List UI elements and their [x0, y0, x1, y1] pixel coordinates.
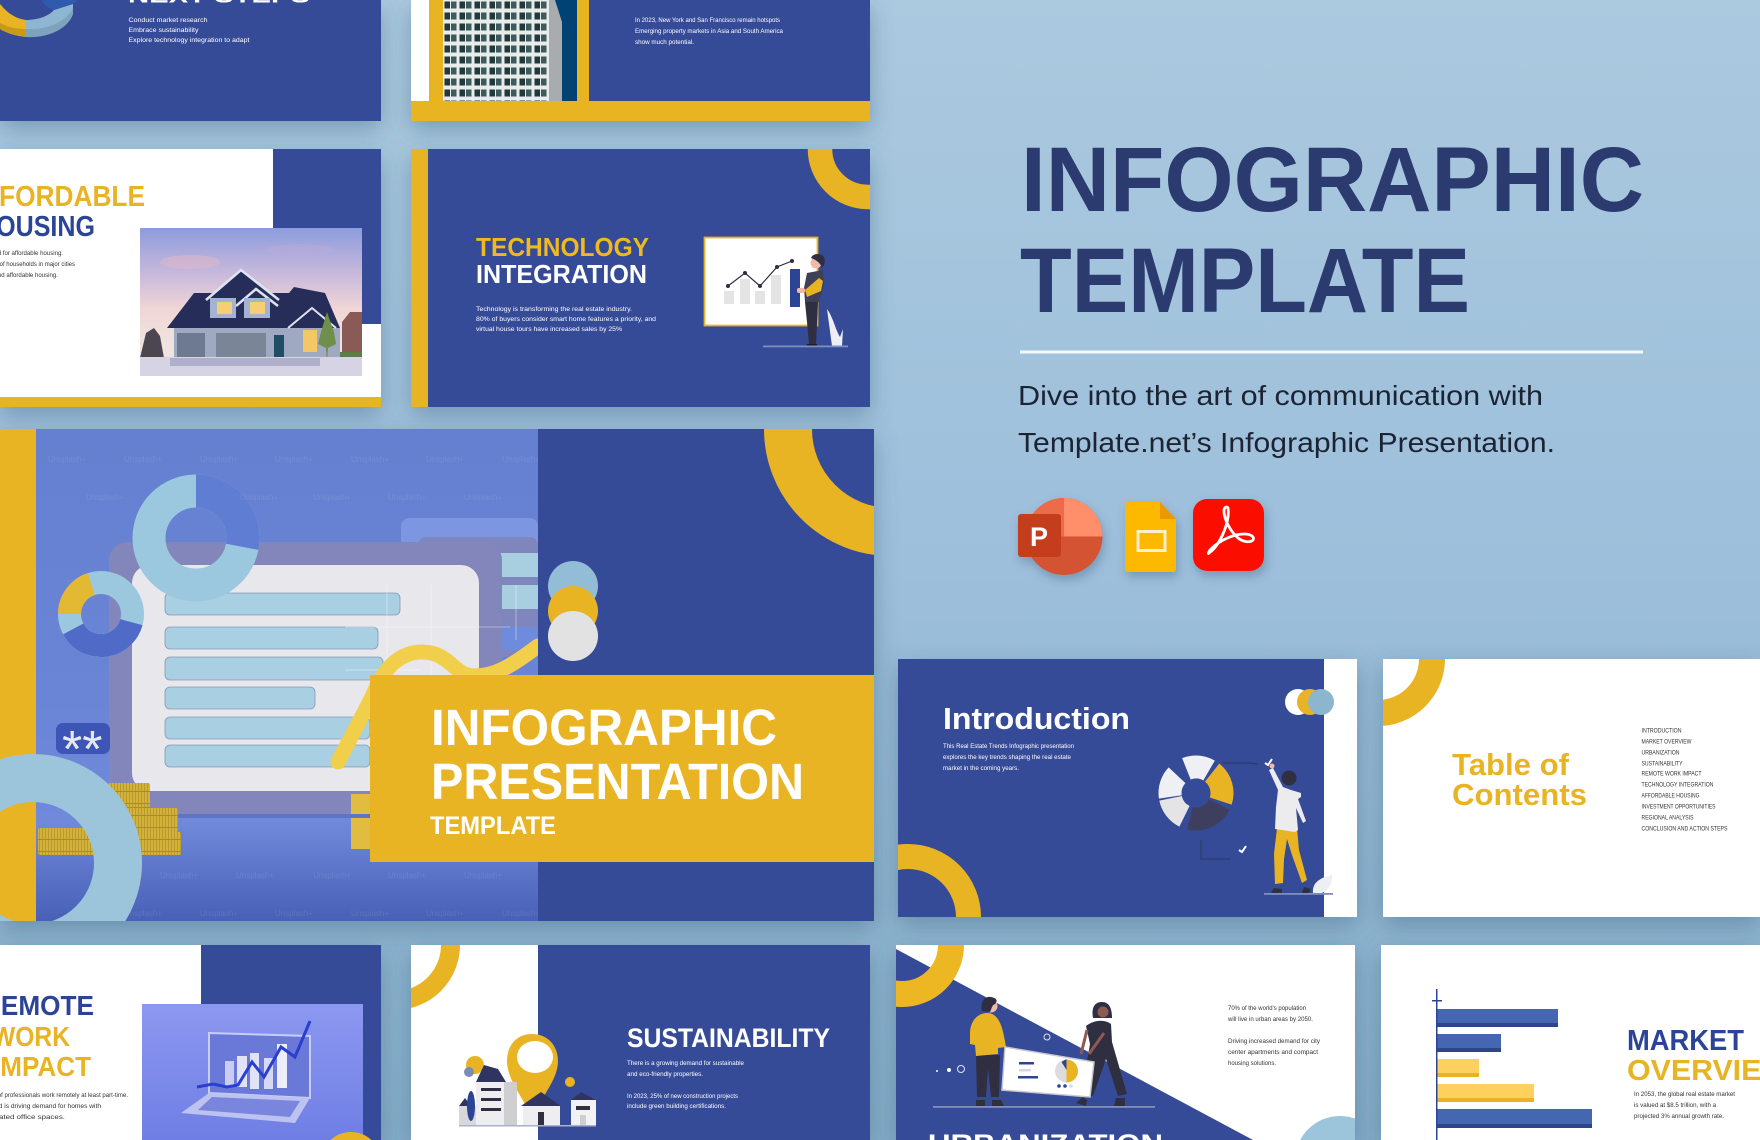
- body text: In 2053, the global real estate market: [1634, 1091, 1735, 1098]
- body text: [128, 17, 250, 44]
- body text: Emerging property markets in Asia and South America: [635, 28, 783, 35]
- body text: projected 3% annual growth rate.: [1634, 1113, 1724, 1120]
- body text: center apartments and compact: [1228, 1049, 1318, 1056]
- watermarks: Unsplash+: [313, 493, 351, 502]
- ring top right: [788, 326, 994, 532]
- 3d scene image: **: [62, 721, 102, 779]
- icon: powerpoint: P: [1030, 522, 1048, 552]
- body text: [0, 1092, 128, 1121]
- icon: google slides: [1125, 502, 1176, 572]
- contents list: SUSTAINABILITY: [1642, 760, 1683, 768]
- title panel: [370, 675, 874, 862]
- heading: Table of: [1452, 747, 1570, 782]
- panel: sustainability slide: [340, 890, 870, 1140]
- person illustration: [1239, 759, 1333, 895]
- contents list: REMOTE WORK IMPACT: [1642, 770, 1702, 778]
- body text: [635, 17, 783, 46]
- illustration: pin and buildings: [459, 1034, 596, 1126]
- icon: powerpoint: [1018, 498, 1102, 575]
- contents list: AFFORDABLE HOUSING: [1642, 792, 1700, 800]
- watermarks: Unsplash+: [351, 455, 389, 464]
- body text: [1227, 1005, 1321, 1067]
- subtitle text: Template.net’s Infographic Presentation.: [1018, 427, 1555, 458]
- body text: show much potential.: [635, 39, 694, 46]
- contents list: CONCLUSION AND ACTION STEPS: [1642, 826, 1728, 832]
- contents list: INTRODUCTION: [1642, 728, 1682, 734]
- watermarks: [48, 455, 540, 918]
- watermarks: Unsplash+: [200, 909, 238, 918]
- three circles: [1285, 689, 1334, 715]
- illustration: two people holding a board: [933, 997, 1155, 1108]
- heading: [0, 990, 94, 1082]
- body text: [627, 1060, 744, 1110]
- photo: skyscraper: [443, 0, 577, 101]
- body text: Explore technology integration to adapt: [128, 37, 250, 44]
- panel: remote work impact slide: [0, 945, 381, 1140]
- ring decoration: [1383, 659, 1445, 726]
- body text: virtual house tours have increased sales by 25%: [476, 326, 622, 333]
- body text: 70% of the world’s population: [1228, 1005, 1306, 1012]
- icon: pdf: [1193, 499, 1264, 571]
- watermarks: Unsplash+: [200, 455, 238, 464]
- body text: Driving increased demand for city: [1228, 1038, 1321, 1045]
- watermarks: Unsplash+: [351, 909, 389, 918]
- body text: Conduct market research: [128, 17, 208, 24]
- ring decoration: [898, 844, 981, 917]
- panel: top centre regional slide: [411, 0, 870, 121]
- heading: INTEGRATION: [476, 259, 647, 289]
- panel: main cover slide: [0, 326, 994, 948]
- contents list: REGIONAL ANALYSIS: [1642, 814, 1694, 822]
- body text: Technology is transforming the real estate industry.: [476, 306, 632, 313]
- title panel: TEMPLATE: [430, 812, 556, 840]
- watermarks: Unsplash+: [48, 455, 86, 464]
- contents list: [1642, 728, 1728, 832]
- body text: This Real Estate Trends Infographic presentation: [943, 743, 1074, 750]
- body text: housing solutions.: [1228, 1060, 1276, 1067]
- photo: house: [140, 228, 362, 376]
- body text: [943, 743, 1074, 772]
- body text: will live in urban areas by 2050.: [1227, 1016, 1313, 1023]
- body text: and eco-friendly properties.: [627, 1071, 703, 1078]
- watermarks: Unsplash+: [275, 455, 313, 464]
- watermarks: Unsplash+: [86, 493, 124, 502]
- contents list: INVESTMENT OPPORTUNITIES: [1642, 804, 1716, 810]
- heading: TECHNOLOGY: [476, 232, 649, 262]
- illustration: presenter with chart: [704, 238, 848, 347]
- watermarks: Unsplash+: [313, 871, 351, 880]
- panel: introduction slide: [848, 659, 1357, 978]
- small donut: [62, 575, 140, 653]
- image: laptop with chart: [142, 1004, 363, 1140]
- bar chart: [1432, 989, 1592, 1140]
- panel: top left next steps slide: [0, 0, 381, 121]
- watermarks: Unsplash+: [464, 871, 502, 880]
- pie illustration: [1159, 756, 1258, 859]
- icon: 3d donut: [0, 0, 78, 37]
- contents list: URBANIZATION: [1642, 750, 1680, 756]
- watermarks: Unsplash+: [388, 493, 426, 502]
- panel: market overview slide: [1381, 945, 1760, 1140]
- body text: 80% of buyers consider smart home features a priority, and: [476, 316, 656, 323]
- watermarks: Unsplash+: [502, 455, 540, 464]
- body text: In 2023, New York and San Francisco remain hotspots: [635, 17, 781, 24]
- watermarks: Unsplash+: [240, 493, 278, 502]
- watermarks: Unsplash+: [388, 871, 426, 880]
- title panel: INFOGRAPHIC: [431, 699, 777, 756]
- body text: [1634, 1091, 1735, 1120]
- heading: SUSTAINABILITY: [627, 1023, 830, 1053]
- heading: [476, 232, 649, 289]
- heading: [0, 181, 145, 243]
- panel: technology integration slide: [411, 101, 916, 407]
- body text: include green building certifications.: [627, 1103, 726, 1110]
- 3d scene image: [36, 429, 540, 921]
- contents list: TECHNOLOGY INTEGRATION: [1642, 782, 1714, 788]
- watermarks: Unsplash+: [426, 909, 464, 918]
- light blue circle: [1295, 1116, 1385, 1140]
- three circles: [548, 561, 598, 661]
- watermarks: Unsplash+: [124, 909, 162, 918]
- heading: infographic template: INFOGRAPHIC: [1021, 129, 1644, 231]
- title panel: PRESENTATION: [431, 753, 804, 810]
- heading: Introduction: [943, 701, 1130, 736]
- subtitle text: [1018, 380, 1555, 458]
- heading: [1452, 747, 1587, 812]
- body text: [476, 306, 656, 333]
- contents list: MARKET OVERVIEW: [1642, 738, 1692, 746]
- watermarks: Unsplash+: [124, 455, 162, 464]
- body text: explores the key trends shaping the real estate: [943, 754, 1071, 761]
- large donut: [149, 491, 243, 585]
- ring decoration: [411, 945, 460, 1008]
- watermarks: Unsplash+: [275, 909, 313, 918]
- watermarks: Unsplash+: [502, 909, 540, 918]
- body text: There is a growing demand for sustainable: [627, 1060, 744, 1067]
- ring decoration: [853, 896, 951, 994]
- heading: MARKET: [1627, 1025, 1744, 1057]
- body text: In 2023, 25% of new construction projects: [627, 1093, 739, 1100]
- heading: [1627, 1025, 1760, 1087]
- watermarks: Unsplash+: [464, 493, 502, 502]
- heading: Contents: [1452, 777, 1587, 812]
- watermarks: Unsplash+: [236, 871, 274, 880]
- watermarks: Unsplash+: [160, 871, 198, 880]
- body text: market in the coming years.: [943, 765, 1019, 772]
- panel: affordable housing slide: [0, 149, 381, 407]
- body text: [0, 250, 76, 279]
- heading: infographic template: TEMPLATE: [1020, 230, 1470, 332]
- heading: infographic template: [1020, 129, 1644, 332]
- body text: is valued at $8.5 trillion, with a: [1634, 1102, 1716, 1109]
- subtitle text: Dive into the art of communication with: [1018, 380, 1543, 411]
- panel: table of contents slide: [1324, 605, 1760, 917]
- body text: Embrace sustainability: [128, 27, 199, 34]
- watermarks: Unsplash+: [426, 455, 464, 464]
- ring decoration: [808, 149, 870, 210]
- blue triangle: [896, 949, 1253, 1140]
- ring bottom left: [0, 778, 118, 948]
- panel: urbanization slide: [853, 896, 1385, 1140]
